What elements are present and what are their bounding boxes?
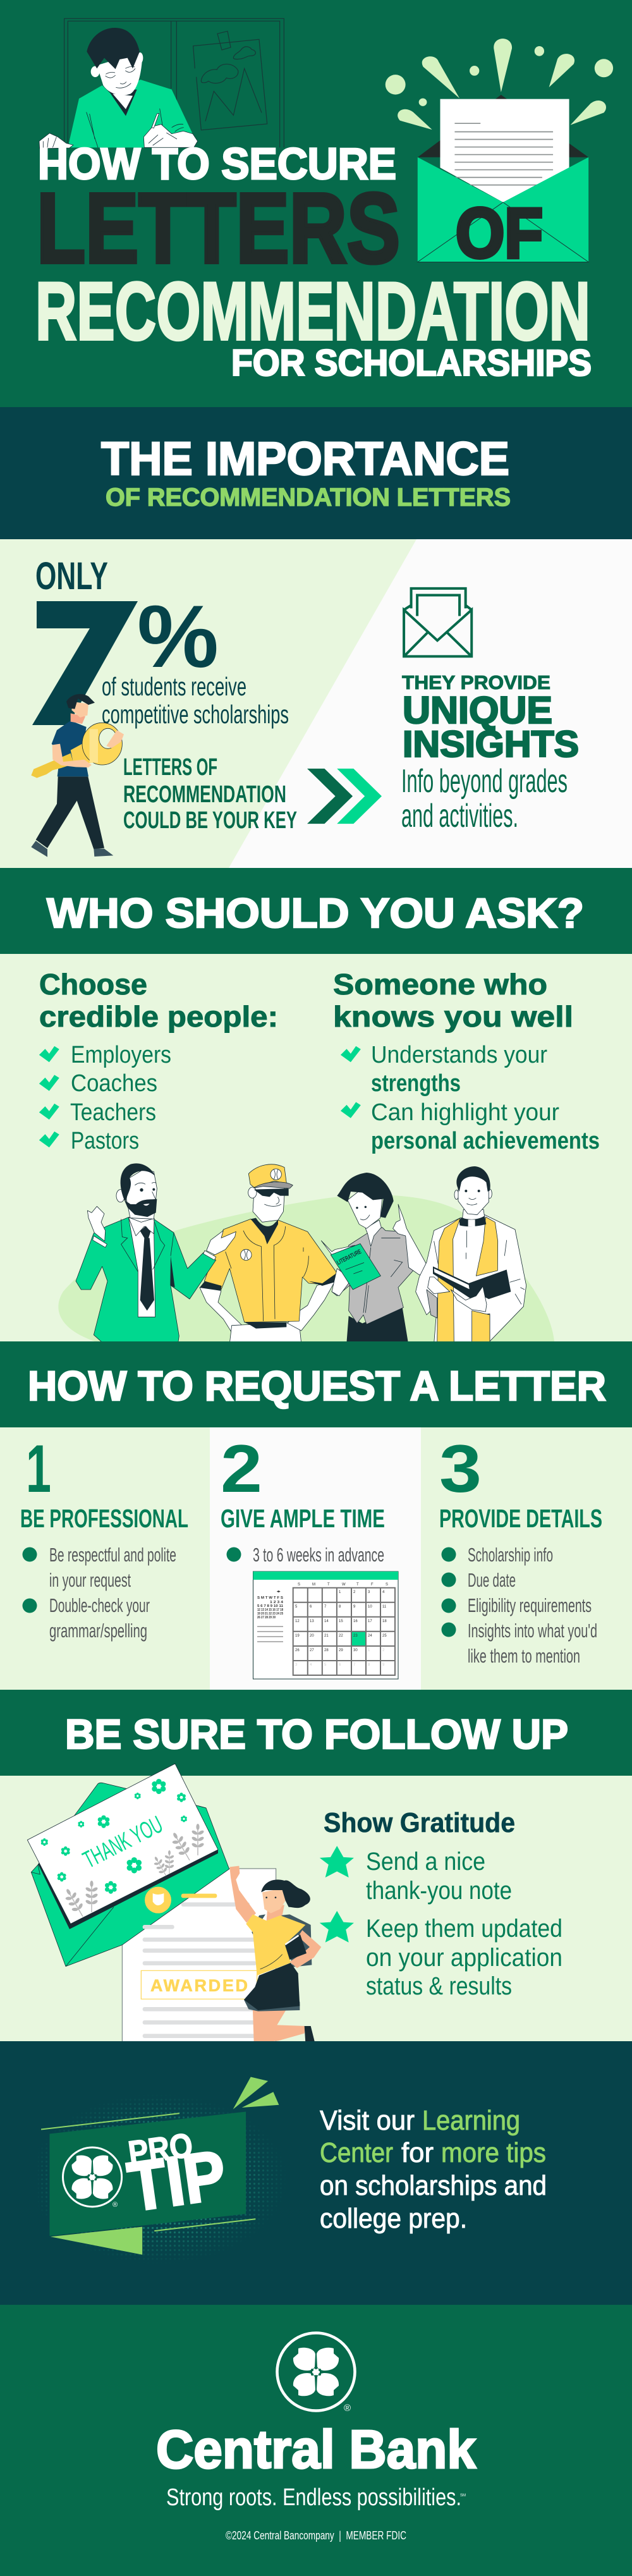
halftone backdrop bbox=[38, 2100, 277, 2258]
text: show gratitude: Show Gratitude bbox=[324, 1807, 515, 1838]
illustration: calendar: 5 6 7 8 9 10 11 bbox=[257, 1604, 283, 1608]
illustration: calendar: T bbox=[327, 1583, 330, 1587]
panel: who should you ask heading bbox=[0, 868, 632, 954]
illustration: calendar: S M T W T F S bbox=[257, 1596, 283, 1600]
text: learning center tip: more tips bbox=[441, 2137, 546, 2168]
illustration: calendar: 5 bbox=[295, 1605, 298, 1609]
illustration: calendar: 26 bbox=[295, 1649, 300, 1652]
title bbox=[35, 139, 592, 384]
figure: employer bbox=[76, 1163, 236, 1343]
illustration: calendar: 24 bbox=[368, 1634, 372, 1638]
illustration: thank-you card and envelope: THANK YOU bbox=[79, 1811, 167, 1874]
column: choose credible people: credible people: bbox=[39, 1000, 278, 1033]
illustration: calendar: 8 bbox=[339, 1605, 341, 1609]
illustration: calendar: F bbox=[371, 1583, 374, 1587]
panel: step 2 give ample time: GIVE AMPLE TIME bbox=[221, 1504, 385, 1533]
column: someone who knows you well bbox=[333, 968, 600, 1154]
panel: who should you ask heading: WHO SHOULD YOU ASK? bbox=[47, 889, 584, 936]
text: gratitude list: thank-you note bbox=[366, 1877, 512, 1905]
title: LETTERS bbox=[37, 173, 400, 284]
badge: pro tip bbox=[41, 2077, 279, 2255]
illustration: student carrying key bbox=[31, 694, 124, 857]
illustration: thank-you card and envelope bbox=[27, 1764, 229, 1967]
text: key statement: RECOMMENDATION bbox=[123, 781, 286, 808]
illustration: calendar: 2 bbox=[382, 1649, 385, 1652]
logo: dogwood flower emblem bbox=[277, 2333, 355, 2414]
logo: dogwood flower emblem: ® bbox=[344, 2403, 351, 2414]
illustration: calendar: 28 bbox=[324, 1649, 329, 1652]
panel: how to request heading: HOW TO REQUEST A LETTER bbox=[28, 1362, 606, 1409]
illustration: calendar: ◂▸ bbox=[276, 1590, 281, 1594]
column: someone who knows you well: Can highlight your bbox=[371, 1099, 559, 1126]
illustration: calendar: 6 bbox=[310, 1605, 312, 1609]
column: choose credible people: Teachers bbox=[70, 1099, 156, 1126]
title: HOW TO SECURE bbox=[38, 139, 396, 188]
big number 7 bbox=[32, 601, 138, 725]
arrows: double chevron bbox=[307, 769, 382, 824]
icon: stars bbox=[320, 1846, 354, 1943]
panel: header bbox=[0, 0, 632, 407]
illustration: calendar: 3 bbox=[368, 1590, 370, 1594]
text: learning center tip: for bbox=[401, 2137, 434, 2168]
panel: step 2 give ample time: 2 bbox=[221, 1431, 262, 1506]
panel: follow up bbox=[0, 1764, 632, 2043]
illustration: calendar: 17 bbox=[368, 1620, 372, 1623]
panel: who should you ask bbox=[0, 954, 632, 1343]
column: choose credible people: Employers bbox=[71, 1042, 171, 1068]
copyright: ©2024 Central Bancompany | MEMBER FDIC bbox=[226, 2529, 406, 2542]
illustration: calendar: 19 20 21 22 23 24 25 bbox=[257, 1612, 283, 1616]
illustration: calendar: 1 bbox=[368, 1649, 370, 1652]
column: choose credible people: Coaches bbox=[71, 1070, 157, 1097]
tagline: Strong roots. Endless possibilities. bbox=[166, 2484, 461, 2511]
column: choose credible people: Pastors bbox=[71, 1128, 139, 1154]
document content: medal, lines and awarded stamp bbox=[141, 1887, 257, 2038]
panel: importance heading bbox=[0, 407, 632, 539]
illustration: calendar: 4 bbox=[310, 1663, 312, 1667]
text: learning center tip: on scholarships and bbox=[320, 2170, 547, 2201]
text: learning center tip bbox=[320, 2105, 547, 2234]
figure: pastor bbox=[416, 1166, 526, 1343]
text: unique insights: UNIQUE bbox=[403, 689, 552, 731]
text: learning center tip: Learning bbox=[422, 2105, 520, 2136]
illustration: calendar: M bbox=[312, 1583, 315, 1587]
badge: pro tip: PRO bbox=[126, 2126, 195, 2173]
illustration: awarded document bbox=[122, 1869, 276, 2042]
panel: step 1 be professional: Be respectful and polite bbox=[49, 1544, 176, 1566]
column: someone who knows you well: Understands your bbox=[371, 1042, 547, 1068]
logo: wordmark: Central Bank bbox=[156, 2420, 477, 2480]
panel: importance statistics bbox=[0, 539, 632, 868]
panel: how to request heading bbox=[0, 1341, 632, 1427]
panel: step 2 give ample time bbox=[210, 1427, 421, 1690]
panel: follow up heading bbox=[0, 1690, 632, 1776]
illustration: calendar: 5 bbox=[324, 1663, 327, 1667]
text: key statement: LETTERS OF bbox=[123, 754, 217, 781]
illustration: calendar: 9 bbox=[382, 1663, 385, 1667]
illustration: calendar: 12 bbox=[295, 1620, 300, 1623]
illustration: calendar: W bbox=[342, 1583, 346, 1587]
illustration: calendar: 9 bbox=[353, 1605, 356, 1609]
panel: importance heading: OF RECOMMENDATION LETTERS bbox=[106, 484, 511, 511]
illustration: calendar: 6 bbox=[339, 1663, 341, 1667]
illustration: calendar: 12 13 14 15 16 17 18 bbox=[257, 1608, 283, 1612]
panel: step 2 give ample time: 3 to 6 weeks in advance bbox=[253, 1544, 384, 1566]
panel: step 1 be professional: BE PROFESSIONAL bbox=[20, 1504, 188, 1533]
title: FOR SCHOLARSHIPS bbox=[231, 343, 592, 384]
illustration: calendar: 4 bbox=[382, 1590, 385, 1594]
badge: pro tip: ® bbox=[112, 2201, 118, 2209]
illustration: calendar: 1 bbox=[339, 1590, 341, 1594]
panel: importance heading: THE IMPORTANCE bbox=[101, 432, 509, 485]
illustration: calendar: T bbox=[356, 1583, 359, 1587]
text: gratitude list: Keep them updated bbox=[366, 1915, 562, 1943]
column: choose credible people bbox=[39, 968, 278, 1154]
text: share of students: of students receive bbox=[102, 672, 246, 701]
illustration: calendar: 13 bbox=[310, 1620, 314, 1623]
book label: LITERATURE bbox=[336, 1248, 363, 1267]
figure: coach bbox=[200, 1164, 338, 1343]
illustration: envelope with letter and burst bbox=[386, 39, 613, 262]
illustration: calendar: 20 bbox=[310, 1634, 314, 1638]
figure: teacher bbox=[321, 1173, 428, 1343]
panel: step 3 provide details: 3 bbox=[439, 1431, 482, 1506]
panel: step 3 provide details: Scholarship info bbox=[468, 1544, 553, 1566]
text: unique insights: INSIGHTS bbox=[403, 724, 579, 765]
panel: pro tip bbox=[0, 2041, 632, 2305]
illustration: calendar: 7 bbox=[353, 1663, 356, 1667]
text: learning center tip: Center bbox=[320, 2137, 393, 2168]
illustration: calendar: 18 bbox=[382, 1620, 387, 1623]
column: someone who knows you well: personal achievements bbox=[371, 1128, 600, 1154]
icon: letter envelope outline bbox=[404, 589, 471, 656]
text: gratitude list: Send a nice bbox=[366, 1848, 485, 1876]
panel: footer bbox=[0, 2305, 632, 2576]
column: choose credible people: Choose bbox=[39, 968, 147, 1001]
illustration: calendar: 15 bbox=[339, 1620, 343, 1623]
illustration: student celebrating bbox=[229, 1866, 321, 2043]
illustration: calendar: 7 bbox=[324, 1605, 327, 1609]
text: key statement: COULD BE YOUR KEY bbox=[123, 807, 297, 834]
panel: step 1 be professional: 1 bbox=[26, 1431, 51, 1506]
panel: step 1 be professional: grammar/spelling bbox=[49, 1620, 147, 1642]
illustration: calendar: 11 bbox=[382, 1605, 387, 1609]
illustration: calendar bbox=[253, 1572, 398, 1679]
column: someone who knows you well: knows you well bbox=[333, 1000, 573, 1033]
illustration: calendar: 8 bbox=[368, 1663, 370, 1667]
text: key statement bbox=[123, 754, 297, 834]
illustration: calendar: 10 bbox=[368, 1605, 372, 1609]
document content: medal, lines and awarded stamp: AWARDED bbox=[150, 1976, 248, 1995]
illustration: calendar: 3 bbox=[295, 1663, 298, 1667]
illustration: calendar: S bbox=[386, 1583, 388, 1587]
illustration: calendar: 27 bbox=[310, 1649, 314, 1652]
panel: step 3 provide details: Due date bbox=[468, 1569, 516, 1591]
column: someone who knows you well: Someone who bbox=[333, 968, 547, 1001]
illustration: calendar: 23 bbox=[353, 1634, 358, 1638]
text: gratitude list bbox=[366, 1848, 562, 2000]
illustration: calendar: 25 bbox=[382, 1634, 387, 1638]
text: gratitude list: on your application bbox=[366, 1944, 562, 1972]
text: unique insights: THEY PROVIDE bbox=[402, 671, 550, 693]
text: unique insights: and activities. bbox=[401, 798, 518, 834]
illustration: calendar: 1 2 3 4 bbox=[270, 1601, 284, 1604]
illustration: calendar: 21 bbox=[324, 1634, 329, 1638]
panel: follow up heading: BE SURE TO FOLLOW UP bbox=[65, 1711, 568, 1757]
illustration: calendar: 30 bbox=[353, 1649, 358, 1652]
illustration: calendar: 22 bbox=[339, 1634, 343, 1638]
panel: step 1 be professional: Double-check your bbox=[49, 1594, 150, 1616]
panel: step 1 be professional: in your request bbox=[49, 1569, 131, 1591]
text: unique insights bbox=[401, 671, 579, 834]
illustration: calendar: S bbox=[298, 1583, 300, 1587]
text: only: ONLY bbox=[35, 554, 108, 597]
text: learning center tip: college prep. bbox=[320, 2203, 467, 2234]
illustration: calendar: 2 bbox=[353, 1590, 356, 1594]
title: OF bbox=[456, 194, 543, 272]
text: gratitude list: status & results bbox=[366, 1972, 512, 2000]
panel: step 1 be professional bbox=[0, 1427, 210, 1690]
illustration: calendar: 29 bbox=[339, 1649, 343, 1652]
column: someone who knows you well: strengths bbox=[371, 1070, 461, 1097]
illustration: calendar: 19 bbox=[295, 1634, 300, 1638]
badge: pro tip: TIP bbox=[123, 2136, 231, 2226]
panel: step 3 provide details bbox=[421, 1427, 632, 1690]
illustration: calendar: 26 27 28 29 30 bbox=[257, 1616, 276, 1620]
text: learning center tip: Visit our bbox=[320, 2105, 415, 2136]
illustration: calendar: 16 bbox=[353, 1620, 358, 1623]
text: share of students: competitive scholarships bbox=[102, 700, 289, 729]
illustration: student writing at a window bbox=[39, 18, 284, 149]
text: share of students bbox=[102, 672, 289, 729]
illustration: credible people group bbox=[58, 1163, 554, 1343]
tagline: SM bbox=[460, 2494, 466, 2498]
percent sign: % bbox=[137, 587, 219, 686]
illustration: calendar: 14 bbox=[324, 1620, 329, 1623]
